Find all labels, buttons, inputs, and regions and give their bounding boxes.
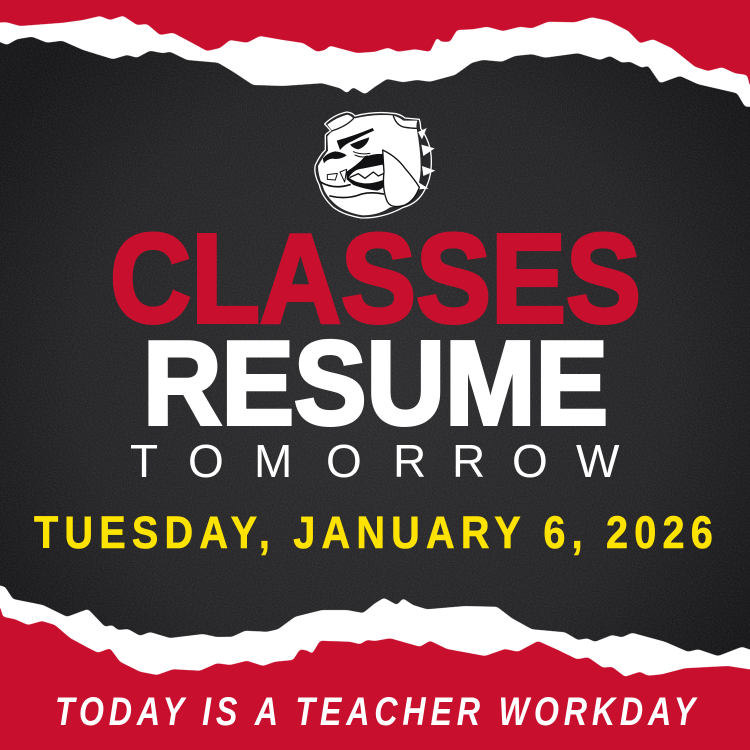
collar spikes — [418, 128, 435, 189]
open mouth — [346, 154, 385, 191]
red band bottom — [0, 604, 750, 750]
brow — [337, 128, 374, 150]
heading: CLASSES: CLASSES — [110, 208, 641, 349]
chin line — [320, 182, 383, 198]
ear lines — [333, 116, 417, 131]
red band top — [0, 0, 750, 90]
white torn strip top — [0, 0, 750, 107]
panel: bottom torn paper edge — [0, 583, 750, 750]
fangs — [327, 169, 347, 182]
jowl — [383, 150, 419, 207]
panel: top torn paper edge — [0, 0, 750, 107]
dog head — [318, 115, 421, 215]
heading: RESUME: RESUME — [143, 317, 608, 450]
subheading: TOMORROW: TOMORROW — [130, 435, 620, 487]
cheek whisker lines — [353, 152, 370, 157]
tongue band — [349, 165, 385, 183]
dog outer outline — [315, 112, 431, 218]
tongue zigzag — [350, 172, 384, 178]
white torn strip bottom — [0, 583, 750, 750]
eye — [350, 137, 369, 149]
icon: bulldog mascot — [315, 112, 435, 218]
nose — [323, 151, 347, 163]
